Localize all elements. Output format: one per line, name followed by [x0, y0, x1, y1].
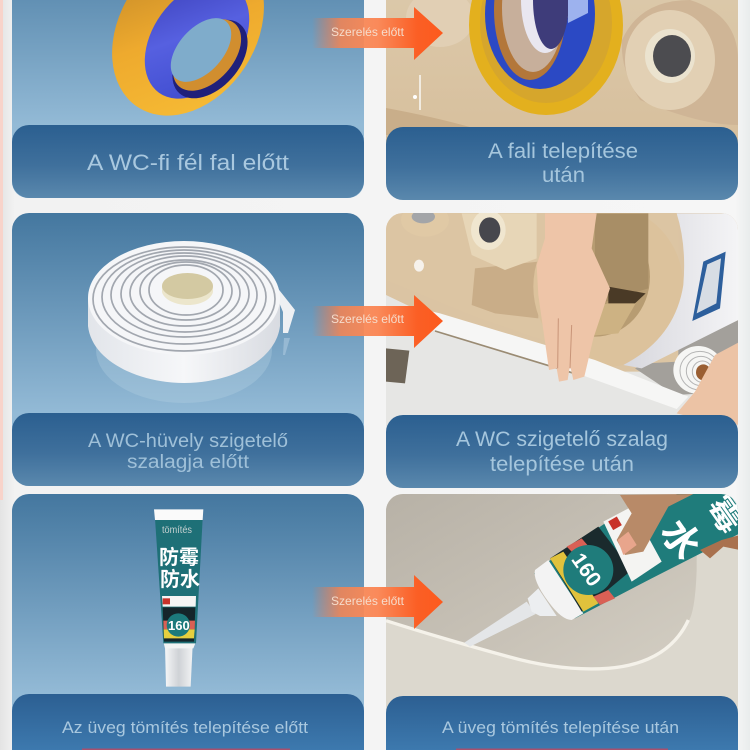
panel: wall ring after photo: [386, 0, 738, 200]
arrow: row 1: Szerelés előtt: [331, 25, 405, 39]
panel: glass sealant after photo: 水: [652, 512, 708, 568]
floor: [386, 295, 738, 492]
label: glass sealant before: Az üveg tömítés telepítése előtt: [62, 718, 308, 737]
label: wall ring before: A WC-fi fél fal előtt: [87, 150, 289, 175]
panel: sealing tape before: [12, 213, 364, 486]
icon: hand holding tube: [617, 494, 740, 558]
label: sealing tape before: szalagja előtt: [127, 452, 250, 473]
icon: sealant tube: [154, 509, 203, 687]
label: sealing tape after: telepítése után: [490, 453, 634, 476]
label: sealing tape before: [12, 413, 364, 486]
label: sealing tape before: A WC-hüvely szigetelő: [88, 431, 288, 452]
icon: tape roll: [88, 241, 295, 403]
icon: debris: [386, 348, 409, 383]
icon: sealant tube: tömítés: [162, 525, 192, 536]
panel: glass sealant after photo: [386, 477, 750, 750]
icon: toilet bowl body: [386, 207, 683, 367]
icon: right hand: [677, 342, 740, 425]
label: glass sealant before: [12, 694, 364, 750]
icon: yellow ring with blue flange: [112, 0, 264, 116]
icon: white sealing tape: [432, 312, 688, 409]
label: glass sealant after: [386, 696, 738, 750]
icon: white bead of sealant: [386, 620, 688, 669]
label: wall ring after: A fali telepítése: [488, 140, 638, 163]
icon: sealant tube: 160: [168, 618, 190, 633]
icon: small tape roll: [673, 346, 717, 394]
icon: sealant gun tube: [464, 494, 738, 646]
icon: plaster flange left: [406, 0, 474, 47]
icon: sealant tube: 防霉: [159, 546, 199, 569]
label: glass sealant after: A üveg tömítés telepítése után: [442, 718, 679, 737]
panel: glass sealant before: [12, 494, 364, 750]
icon: white tank with label: [623, 213, 738, 368]
arrow: row 3: [312, 575, 443, 629]
icon: installed yellow and blue ring: [469, 0, 623, 115]
panel: sealing tape after photo: [386, 203, 740, 492]
label: sealing tape after: A WC szigetelő szalag: [456, 428, 668, 451]
panel: wall ring before: [12, 0, 364, 198]
icon: sealant tube: 防水: [160, 568, 200, 591]
arrow: row 1: [312, 7, 443, 60]
icon: plaster flanges: [412, 213, 536, 272]
arrow: row 2: [312, 295, 443, 348]
arrow: row 3: Szerelés előtt: [331, 594, 405, 608]
icon: plaster flange with dark hole: [622, 0, 738, 125]
label: wall ring before: [12, 125, 364, 198]
icon: left hand on tape: [537, 213, 610, 382]
label: wall ring after: [386, 127, 738, 200]
label: sealing tape after: [386, 415, 738, 488]
label: wall ring after: után: [542, 164, 585, 187]
panel: glass sealant after photo: 160: [567, 549, 605, 591]
arrow: row 2: Szerelés előtt: [331, 312, 405, 326]
